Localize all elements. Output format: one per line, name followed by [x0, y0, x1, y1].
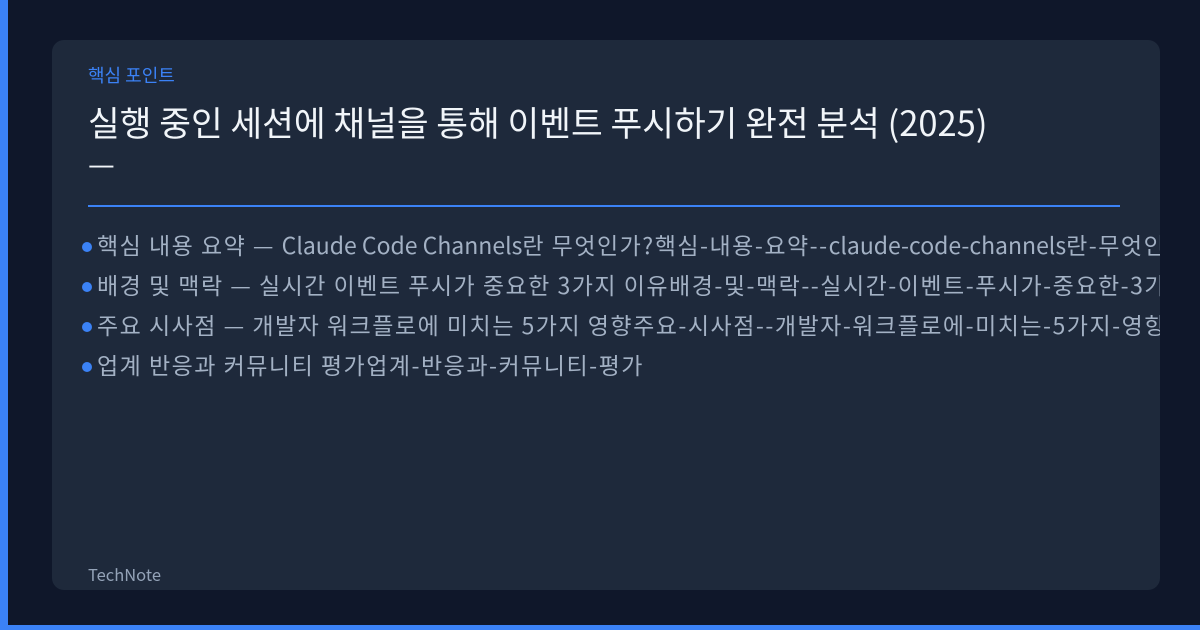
- eyebrow label: 핵심 포인트: [88, 62, 175, 88]
- bullet list: [82, 227, 1160, 381]
- bullet 4: 업계 반응과 커뮤니티 평가업계-반응과-커뮤니티-평가: [97, 347, 644, 381]
- bullet 3: 주요 시사점 — 개발자 워크플로에 미치는 5가지 영향주요-시사점--개발자-워크플로에-미치는-5가지-영향: [97, 307, 1160, 341]
- bullet 1: 핵심 내용 요약 — Claude Code Channels란 무엇인가?핵심-내용-요약--claude-code-channels란-무엇인가: [97, 227, 1160, 261]
- title dash: —: [88, 140, 115, 184]
- title: 실행 중인 세션에 채널을 통해 이벤트 푸시하기 완전 분석 (2025): [88, 96, 987, 146]
- footer brand: TechNote: [88, 562, 161, 586]
